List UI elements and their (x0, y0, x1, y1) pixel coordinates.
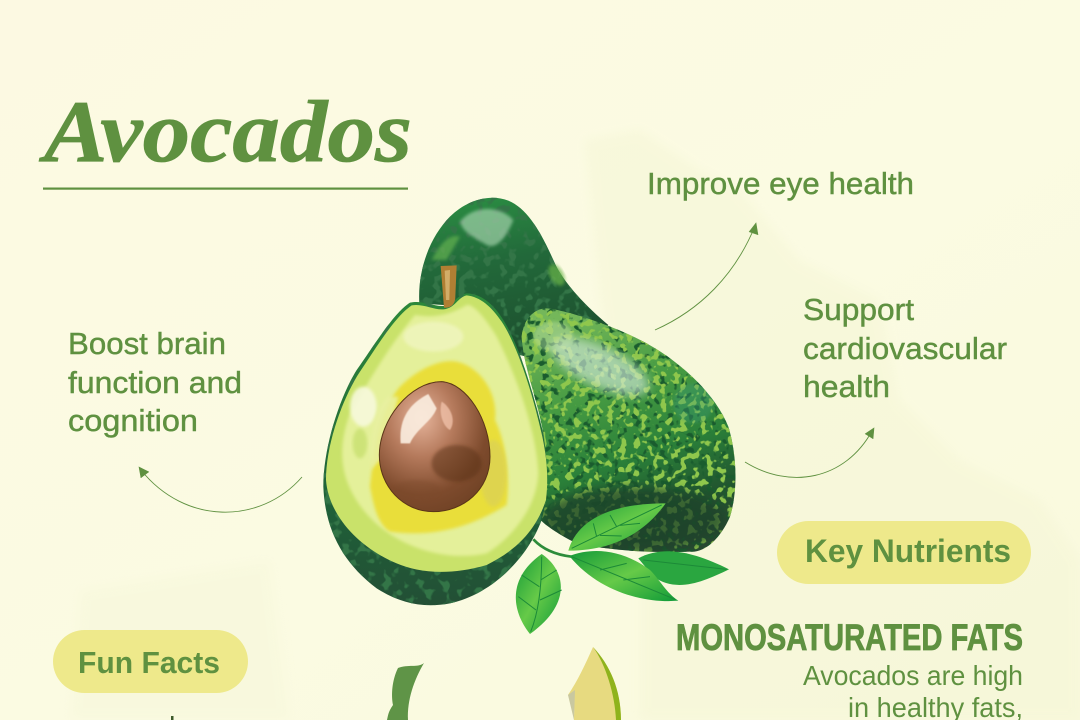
title underline (43, 188, 408, 190)
flesh (326, 295, 547, 572)
callout: boost brain function: Boost brain (68, 326, 226, 361)
nutrient: monosaturated fats (676, 617, 1023, 720)
callout: boost brain function (68, 326, 242, 438)
leaf: far right (638, 551, 729, 585)
branch (533, 539, 572, 557)
fun fact text top (171, 716, 174, 720)
title: Avocados (39, 84, 412, 181)
callout: support cardiovascular health: Support (803, 292, 914, 327)
callout: support cardiovascular health: health (803, 369, 890, 404)
leaf: top right (568, 503, 666, 551)
halved avocado (323, 293, 547, 605)
pit (379, 382, 490, 512)
front avocado (522, 308, 735, 553)
arrow: to brain function (139, 467, 302, 512)
icon: leaf at bottom (387, 663, 424, 720)
arrow: to cardiovascular health (745, 428, 874, 477)
yellow ring (370, 361, 508, 533)
leaf: lower (569, 551, 678, 601)
callout: boost brain function: function and (68, 365, 242, 400)
leaf: bottom (516, 554, 562, 634)
icon: avocado slice at bottom (568, 647, 621, 720)
callout: support cardiovascular health (803, 292, 1007, 404)
callout: improve eye health: Improve eye health (647, 166, 914, 201)
nutrient: monosaturated fats: Avocados are high (803, 660, 1023, 691)
pill: key nutrients (777, 521, 1031, 584)
callout: boost brain function: cognition (68, 403, 198, 438)
pill: key nutrients: Key Nutrients (805, 533, 1011, 569)
illustration: avocados and leaves (323, 198, 735, 634)
arrow: to eye health (655, 223, 758, 330)
stem (441, 265, 457, 308)
callout: support cardiovascular health: cardiovascular (803, 331, 1007, 366)
pill: fun facts: Fun Facts (78, 645, 220, 680)
back avocado (419, 198, 608, 367)
pill: fun facts (53, 630, 248, 693)
